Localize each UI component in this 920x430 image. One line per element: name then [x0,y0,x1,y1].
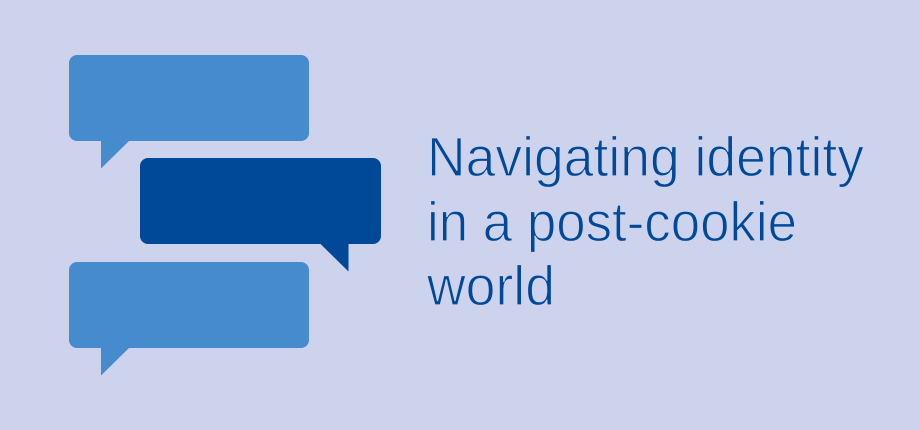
title [426,125,864,317]
title: in a post-cookie [427,190,797,253]
icon: middle speech bubble [140,158,381,272]
title: world [426,254,555,317]
title: Navigating identity [427,125,864,188]
icon: speech bubbles [69,55,381,376]
icon: bottom speech bubble [69,262,309,376]
icon: top speech bubble [69,55,309,168]
